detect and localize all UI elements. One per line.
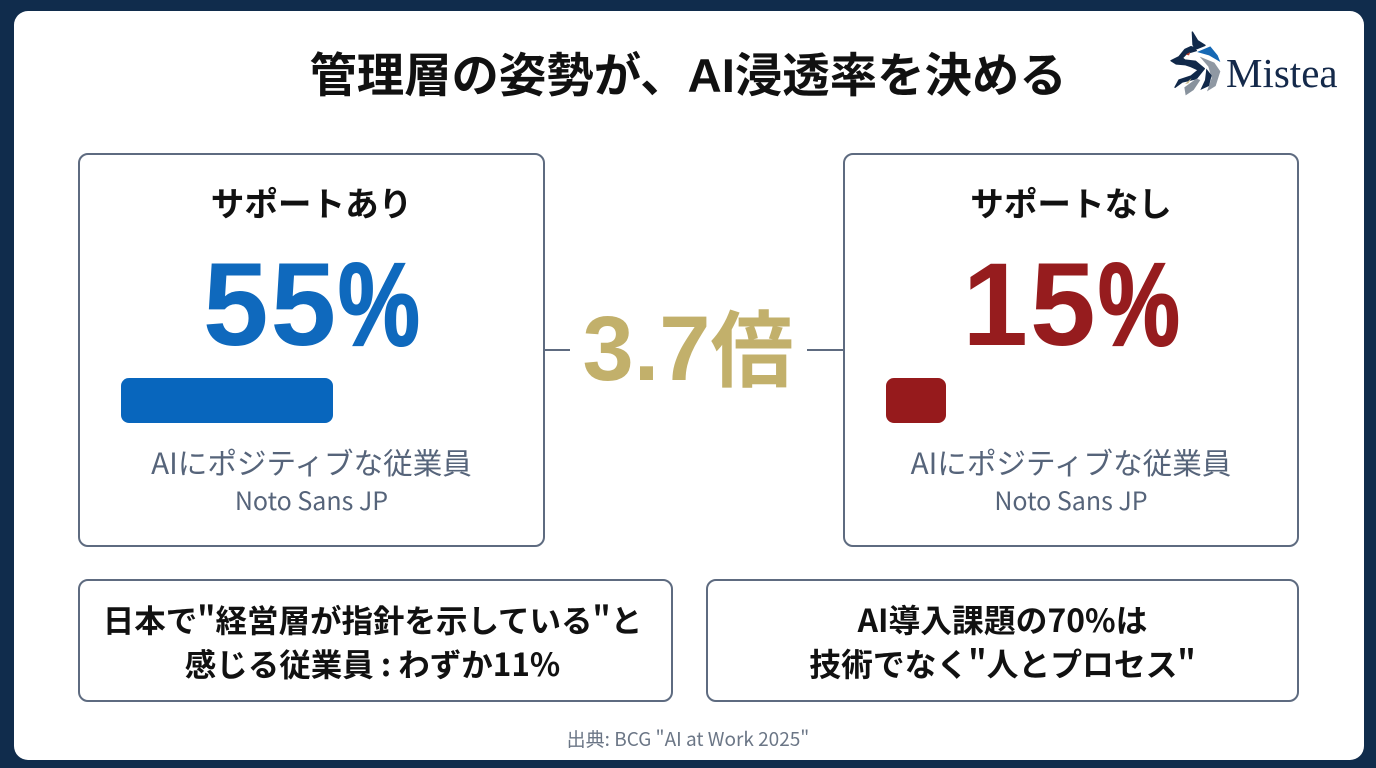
stat: 55%: % [338, 239, 420, 371]
callout text: adoption challenges: AI導入課題の70%は [858, 596, 1147, 642]
callout text: leadership guidance: 感じる従業員 : わずか11% [185, 640, 560, 686]
stat: 15% [962, 239, 1180, 371]
callout text: leadership guidance [103, 596, 642, 686]
source note: 出典: BCG "AI at Work 2025" [567, 725, 809, 752]
callout text: adoption challenges [809, 596, 1196, 686]
bar: 55% [121, 378, 333, 423]
connector: left [545, 349, 570, 351]
stat: 55% [203, 239, 420, 371]
callout text: leadership guidance: 日本で"経営層が指針を示している"と [103, 596, 642, 642]
panel: support no [843, 153, 1299, 547]
callout: adoption challenges [706, 579, 1299, 702]
logo wordmark: Mistea [1226, 50, 1338, 96]
title: 管理層の姿勢が、AI浸透率を決める [309, 50, 1067, 103]
multiplier: 3.7x: 3.7倍 [583, 298, 793, 400]
stat: 55%: 55 [203, 239, 338, 371]
heading: support no: サポートなし [970, 187, 1172, 224]
connector: right [807, 349, 844, 351]
label: font name: Noto Sans JP [994, 482, 1148, 518]
stat: 15%: 15 [962, 239, 1098, 371]
callout text: adoption challenges: 技術でなく"人とプロセス" [809, 640, 1196, 686]
icon: wolf head [1170, 31, 1220, 96]
label: positive employees: AIにポジティブな従業員 [151, 440, 472, 483]
label: positive employees: AIにポジティブな従業員 [911, 440, 1231, 483]
bar: 15% [886, 378, 946, 423]
logo: Mistea [1170, 31, 1338, 96]
callout: leadership guidance [78, 579, 673, 702]
panel: support yes [78, 153, 545, 547]
label: font name: Noto Sans JP [235, 482, 388, 518]
stat: 15%: % [1098, 239, 1180, 371]
heading: support yes: サポートあり [211, 187, 412, 224]
